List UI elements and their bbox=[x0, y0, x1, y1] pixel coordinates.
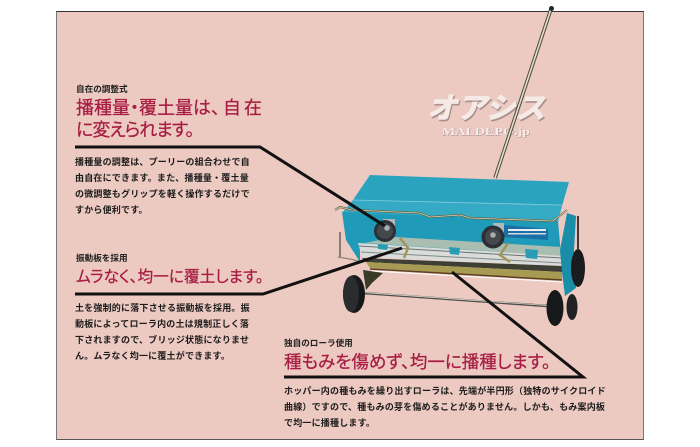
label: unique roller used: 独自のローラ使用 bbox=[284, 338, 353, 348]
text: vibration plate description: 動板によってローラ内の土は規制正しく落 bbox=[75, 319, 249, 329]
heading: seed and soil amount: 播種量・覆土量は、自在 bbox=[76, 98, 265, 118]
leader line: seed amount bbox=[75, 147, 385, 226]
heading: seed and soil amount bbox=[76, 98, 265, 140]
text: adjustment description: 由自在にできます。また、播種量・覆土量 bbox=[75, 173, 249, 183]
machine: seed spreader bbox=[335, 175, 585, 326]
section 2: vibration plate bbox=[75, 253, 264, 361]
text: roller description: 曲線）ですので、種もみの芽を傷めることがありません。しかも、もみ案内板 bbox=[284, 402, 605, 412]
heading: seed and soil amount: に変えられます。 bbox=[76, 120, 193, 140]
section 1: adjustable amounts bbox=[75, 84, 265, 215]
text: adjustment description: すから便利です。 bbox=[75, 205, 148, 215]
text: roller description bbox=[284, 386, 606, 428]
heading: even soil covering: ムラなく、均一に覆土します。 bbox=[76, 269, 264, 286]
text: adjustment description: 播種量の調整は、プーリーの組合わせで自 bbox=[75, 157, 250, 167]
text: vibration plate description: 下されますので、ブリッジ状態になりませ bbox=[75, 335, 249, 345]
leader line: vibration plate bbox=[75, 248, 402, 294]
label: vibration plate used: 振動板を採用 bbox=[76, 253, 128, 263]
text: adjustment description: の微調整もグリップを軽く操作するだけで bbox=[75, 189, 250, 199]
watermark: logo bbox=[427, 93, 547, 138]
text: adjustment description bbox=[75, 157, 250, 215]
text: roller description: で均一に播種します。 bbox=[284, 418, 375, 428]
heading: undamaged seed: 種もみを傷めず、均一に播種します。 bbox=[284, 352, 551, 372]
watermark: logo: オアシス bbox=[427, 93, 546, 125]
section 3: unique roller bbox=[284, 338, 606, 428]
text: vibration plate description: ん。ムラなく均一に覆土ができます。 bbox=[75, 351, 230, 361]
watermark: logo: MALDEPO.jp bbox=[442, 126, 530, 138]
text: vibration plate description: 土を強制的に落下させる振動板を採用。振 bbox=[75, 303, 250, 313]
label: adjustment type: 自在の調整式 bbox=[76, 84, 128, 94]
text: roller description: ホッパー内の種もみを繰り出すローラは、先端が半円形（独特のサイクロイド bbox=[284, 386, 606, 396]
watermark: logo: MALDEPO.jp bbox=[442, 126, 530, 138]
icon: push handle bbox=[495, 6, 554, 178]
text: vibration plate description bbox=[75, 303, 250, 361]
watermark: logo: オアシス bbox=[428, 94, 547, 126]
leader line: roller bbox=[284, 272, 583, 377]
